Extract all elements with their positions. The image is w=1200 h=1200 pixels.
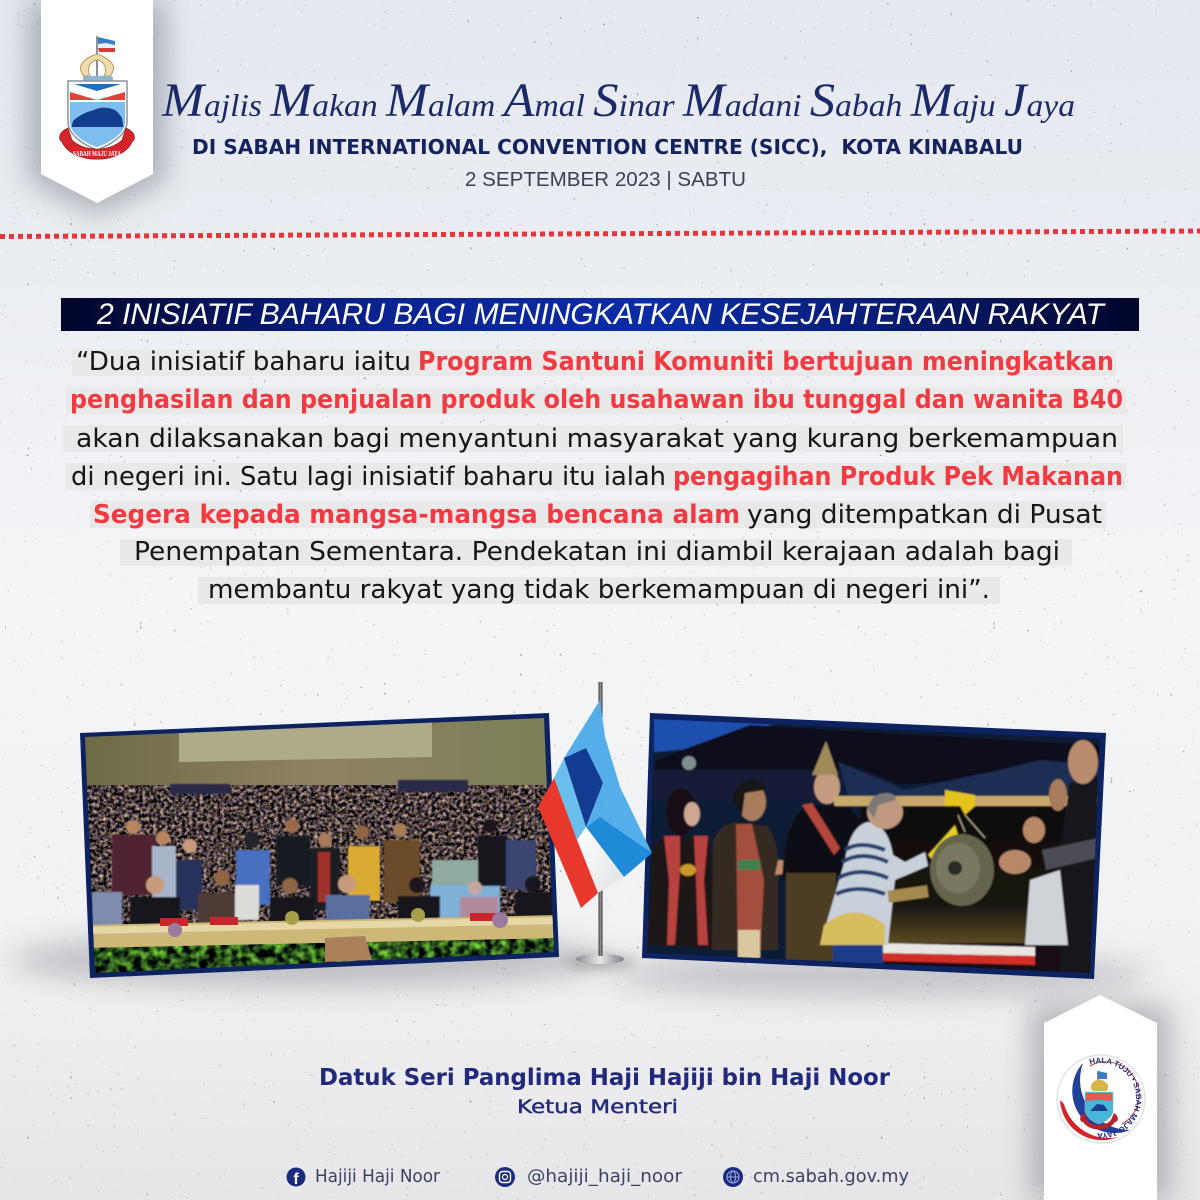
social: Facebook: Hajiji Haji Noor bbox=[315, 1166, 441, 1187]
quote text block: Penempatan Sementara. Pendekatan ini diambil kerajaan adalah bagi bbox=[134, 537, 1060, 567]
quote text block: yang ditempatkan di Pusat bbox=[747, 500, 1102, 530]
quote text block: “Dua inisiatif baharu iaitu bbox=[76, 347, 411, 377]
quote text block: membantu rakyat yang tidak berkemampuan di negeri ini”. bbox=[208, 575, 990, 605]
photo: audience at the dinner hall bbox=[80, 710, 560, 980]
bottom-right white ribbon with round logo bbox=[1044, 995, 1157, 1200]
name: Chief Minister: Datuk Seri Panglima Haji Hajiji bin Haji Noor bbox=[319, 1065, 891, 1091]
quote text block: penghasilan dan penjualan produk oleh usahawan ibu tunggal dan wanita B40 bbox=[70, 385, 1123, 415]
quote text block: di negeri ini. Satu lagi inisiatif baharu itu ialah bbox=[71, 462, 666, 492]
icon: Sabah coat of arms: SABAH MAJU JAYA bbox=[73, 150, 121, 158]
icon: Hala Tuju round badge bbox=[1056, 1054, 1146, 1144]
icon: Sabah coat of arms bbox=[60, 36, 134, 159]
icon: Sabah flag on pole bbox=[538, 682, 652, 968]
icon: Hala Tuju round badge: HALA TUJU • SABAH MAJU JAYA bbox=[1089, 1058, 1142, 1138]
heading bar: 2 INISIATIF BAHARU BAGI MENINGKATKAN KESEJAHTERAAN RAKYAT bbox=[96, 298, 1107, 331]
title: script event name: Majlis Makan Malam Amal Sinar Madani Sabah Maju Jaya bbox=[161, 74, 1075, 127]
quote text block: Segera kepada mangsa-mangsa bencana alam bbox=[93, 500, 740, 530]
quote text block: pengagihan Produk Pek Makanan bbox=[673, 462, 1123, 492]
social: Instagram: @hajiji_haji_noor bbox=[527, 1166, 683, 1187]
social: Facebook: f bbox=[293, 1171, 299, 1188]
quote text block bbox=[63, 347, 1126, 605]
top-left white ribbon with state crest bbox=[41, 0, 153, 203]
photo: gong-striking ceremony bbox=[640, 710, 1110, 980]
quote text block: akan dilaksanakan bagi menyantuni masyarakat yang kurang berkemampuan bbox=[76, 424, 1118, 454]
date line: 2 SEPTEMBER 2023 | SABTU bbox=[465, 169, 746, 191]
quote text block: Program Santuni Komuniti bertujuan meningkatkan bbox=[418, 347, 1114, 377]
role label: Ketua Menteri bbox=[517, 1096, 678, 1118]
subtitle: venue: DI SABAH INTERNATIONAL CONVENTION CENTRE (SICC), KOTA KINABALU bbox=[192, 135, 1023, 159]
social: website: cm.sabah.gov.my bbox=[753, 1166, 909, 1187]
